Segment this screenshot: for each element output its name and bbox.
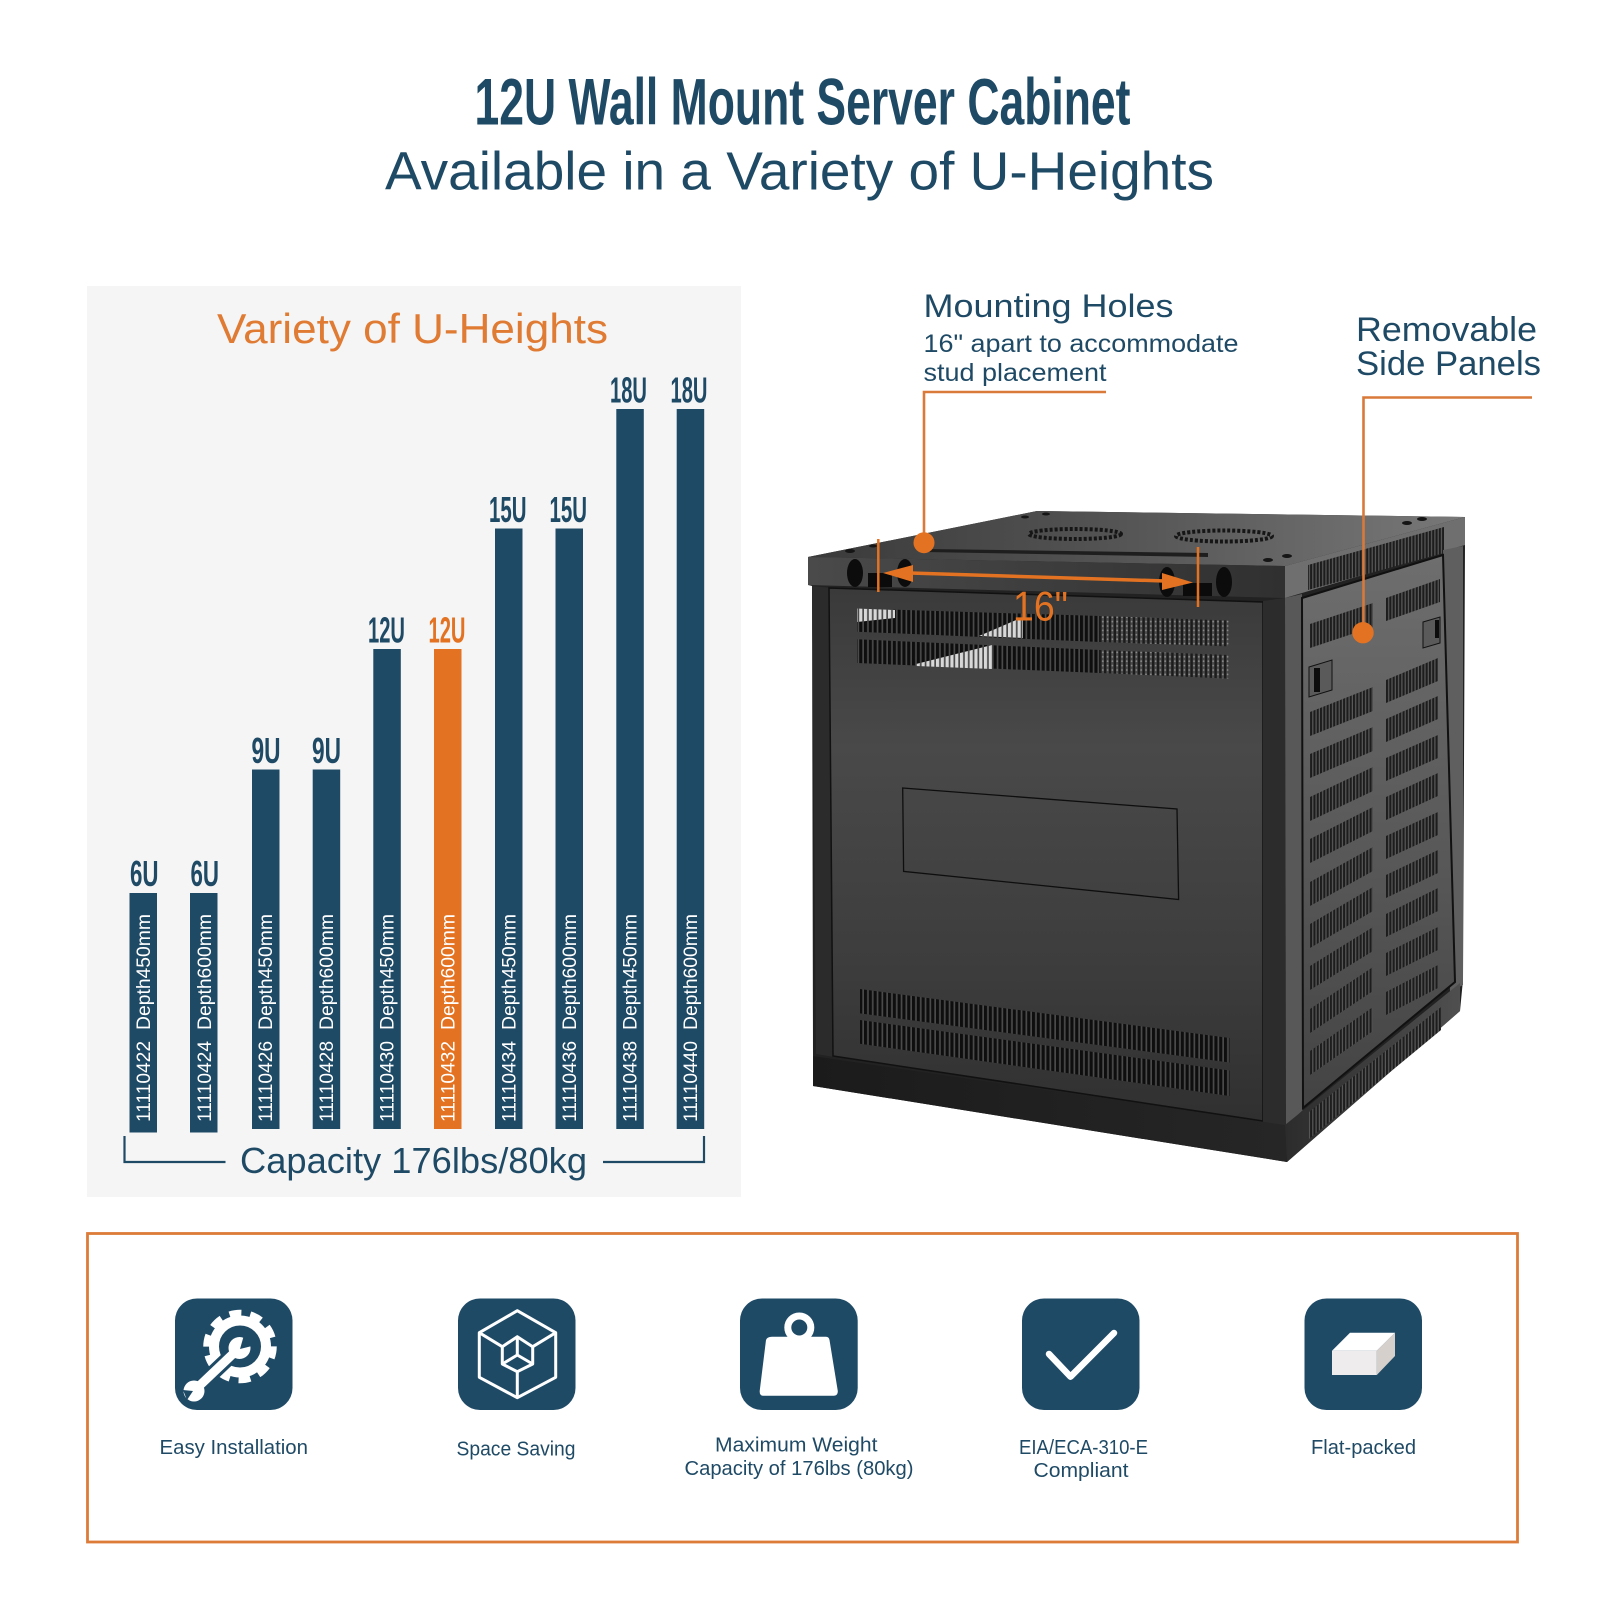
callout heading: Mounting Holes [924,288,1174,324]
rack mounting slots [847,559,1232,597]
top recess and fan grills [845,512,1427,562]
callout heading: Removable [1356,311,1537,349]
callout heading: Side Panels [1356,345,1541,383]
callout description [924,330,1238,387]
label: Flat-packed [1311,1437,1416,1459]
callout description: 16" apart to accommodate [924,330,1238,358]
door window outline [903,788,1179,900]
label: EIA/ECA-310-E [1019,1437,1148,1459]
front top lip [808,557,1285,598]
side panel vents [1310,579,1440,1075]
right front post [1263,598,1286,1126]
bar: 15U 11110436 [550,489,587,1129]
bar: 9U 11110428: 11110428 [317,1041,338,1122]
bar: 18U 11110440: Depth600mm [681,914,702,1030]
bar: 6U 11110422 [130,853,158,1132]
side lip vents [1308,527,1444,590]
bar: 15U 11110434: 11110434 [500,1041,520,1122]
bar: 18U 11110440: 11110440 [681,1041,702,1122]
label: Easy Installation [160,1437,308,1459]
feature: flat-packed [1304,1298,1422,1459]
label: Maximum Weight [715,1435,878,1457]
side panel latches [1309,617,1440,697]
bar: 15U 11110434: 15U [489,489,526,530]
bar: 12U 11110432 highlighted: 12U [428,610,466,650]
callout heading [1356,311,1541,383]
icon: flat box [1304,1298,1422,1410]
label [1019,1437,1148,1482]
callout: mounting holes [914,288,1238,553]
bar: 15U 11110434 [489,489,526,1129]
cabinet silhouette [808,511,1465,1162]
bar: 12U 11110430: 11110430 [378,1041,398,1122]
icon: weight [740,1298,858,1410]
bar: 6U 11110422: 11110422 [134,1041,155,1122]
bar: 18U 11110438: 11110438 [620,1041,642,1122]
callout dot [1352,622,1374,643]
callout dot [914,532,934,553]
icon: gear and wrench [175,1298,292,1410]
panel: variety of U-heights bar chart [87,286,741,1197]
callout leader [1364,398,1532,632]
feature: maximum weight [684,1298,914,1480]
bar: 9U 11110428 [312,730,341,1129]
bar: 9U 11110426: 11110426 [256,1041,277,1122]
panel: features [88,1234,1518,1542]
base side vents [1309,1007,1441,1139]
feature: space saving [456,1298,576,1461]
capacity bracket [124,1136,704,1162]
bar: 18U 11110440: 18U [670,370,708,410]
callout: removable side panels [1352,311,1541,643]
left post [812,586,834,1057]
bar: 12U 11110430: Depth450mm [378,914,398,1030]
bar: 12U 11110432 highlighted [428,610,466,1129]
lower door vents [860,989,1230,1096]
label: Space Saving [456,1439,576,1461]
features frame [88,1234,1518,1542]
callout leader [924,392,1106,543]
bar: 6U 11110422: Depth450mm [134,914,155,1030]
bar: 9U 11110428: 9U [312,730,341,771]
side corner strip [1285,594,1303,1126]
bar: 12U 11110430 [368,610,405,1129]
product illustration: server cabinet [808,511,1465,1162]
bar: 15U 11110436: 15U [550,489,587,530]
side top lip [1285,517,1465,598]
capacity label: Capacity 176lbs/80kg [240,1140,587,1181]
label: Compliant [1034,1460,1129,1482]
bar: 6U 11110424 [190,853,219,1132]
bar: 9U 11110426 [252,730,280,1129]
bar: 15U 11110434: Depth450mm [500,914,520,1030]
front door [829,588,1263,1121]
title: 12U Wall Mount Server Cabinet [474,64,1131,138]
feature: EIA/ECA compliant [1019,1298,1148,1482]
bar: 15U 11110436: 11110436 [560,1041,581,1122]
dimension arrow [883,565,1193,590]
bar: 6U 11110424: Depth600mm [195,914,216,1030]
cabinet top surface [808,511,1465,566]
icon: check mark [1022,1298,1140,1410]
label: Capacity of 176lbs (80kg) [684,1458,914,1480]
bar: 6U 11110422: 6U [130,853,158,894]
icon: nested cube [458,1298,576,1410]
bar: 18U 11110440 [670,370,708,1129]
bar: 18U 11110438: Depth450mm [620,914,642,1030]
bar: 15U 11110436: Depth600mm [560,914,581,1030]
callout: 16 inch dimension [878,539,1198,630]
bar: 12U 11110432 highlighted: Depth600mm [438,914,460,1030]
base front [813,1056,1287,1162]
right rear post [1443,546,1463,992]
side panel [1302,555,1455,1108]
bar: 18U 11110438: 18U [610,370,647,410]
bar: 12U 11110432 highlighted: 11110432 [438,1041,460,1122]
dimension label: 16" [1013,582,1068,630]
dimension tick left [877,539,880,592]
panel background [87,286,741,1197]
panel heading: Variety of U-Heights [217,305,608,352]
feature: easy installation [160,1298,308,1459]
bar: 6U 11110424: 6U [190,853,219,894]
bar: 9U 11110426: Depth450mm [256,914,277,1030]
label [684,1435,914,1480]
upper door vents [857,608,1229,679]
bar: 12U 11110430: 12U [368,610,405,650]
base side [1285,983,1460,1162]
callout description: stud placement [924,359,1107,387]
subtitle: Available in a Variety of U-Heights [385,142,1214,202]
bar: 9U 11110428: Depth600mm [317,914,338,1030]
bar: 18U 11110438 [610,370,647,1129]
bar: 9U 11110426: 9U [252,730,280,771]
bar: 6U 11110424: 11110424 [195,1041,216,1122]
dimension tick right [1197,547,1199,607]
